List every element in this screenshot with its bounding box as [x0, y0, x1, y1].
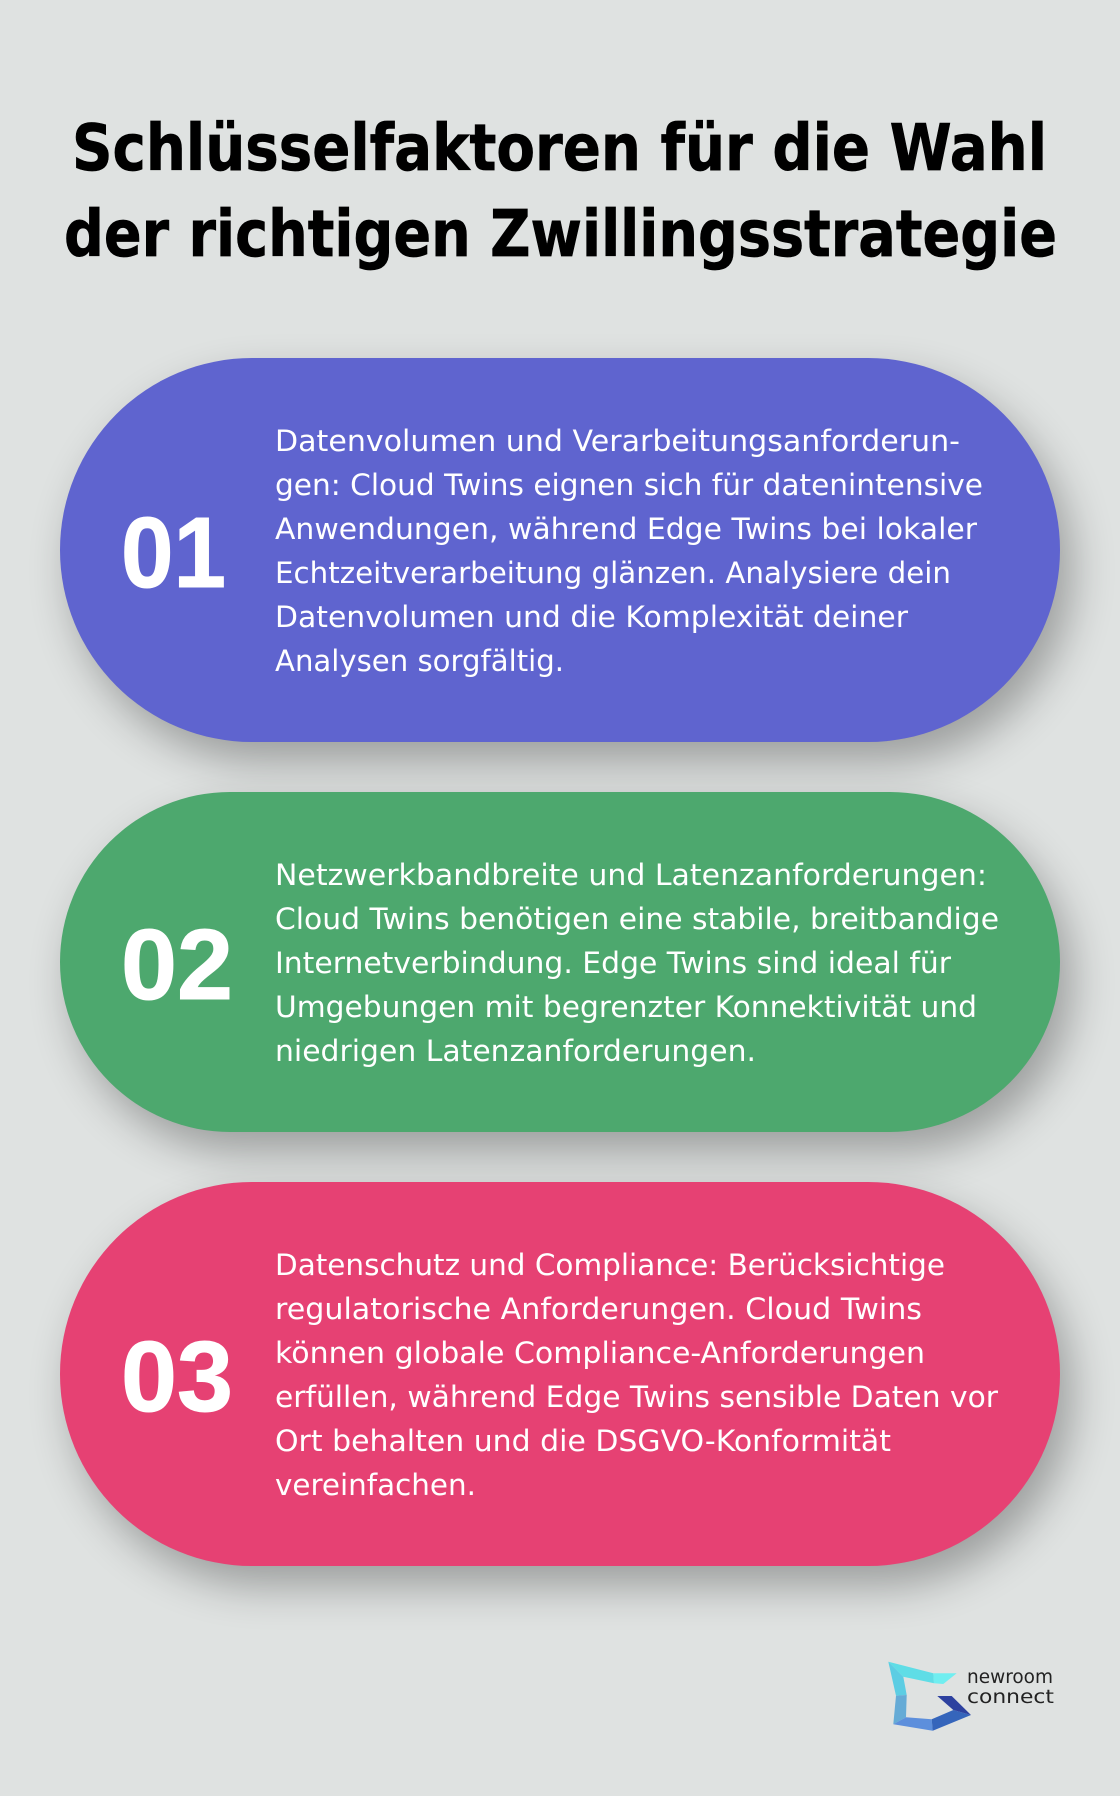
logo wordmark [967, 1666, 1054, 1708]
icon: logo mark [888, 1662, 971, 1731]
number 03: 03 [121, 1321, 233, 1433]
text: Datenschutz und Compliance: regulatorische Anforderungen. Cloud Twins [275, 1292, 922, 1326]
text: Netzwerkbandbreite und Latenz: niedrigen Latenzanforderungen. [275, 1034, 756, 1068]
text: Datenschutz und Compliance [275, 1248, 998, 1502]
text: Netzwerkbandbreite und Latenz: Internetverbindung. Edge Twins sind ideal für [275, 946, 951, 980]
text: Datenschutz und Compliance: erfüllen, während Edge Twins sensible Daten vor [275, 1380, 998, 1414]
title [64, 112, 1057, 272]
text: Datenvolumen und Verarbeitung: Analysen sorgfältig. [275, 644, 564, 678]
text: Datenvolumen und Verarbeitung: Datenvolumen und die Komplexität deiner [275, 600, 908, 634]
number 01: 01 [121, 497, 226, 609]
text: Datenschutz und Compliance: Datenschutz und Compliance: Berücksichtige [275, 1248, 945, 1282]
text: Netzwerkbandbreite und Latenz: Cloud Twins benötigen eine stabile, breitbandige [275, 902, 999, 936]
text: Netzwerkbandbreite und Latenz: Netzwerkbandbreite und Latenzanforderungen: [275, 858, 987, 892]
text: Datenschutz und Compliance: Ort behalten und die DSGVO-Konformität [275, 1424, 891, 1458]
panel: Netzwerkbandbreite [60, 792, 1060, 1132]
text: Datenvolumen und Verarbeitung: gen: Cloud Twins eignen sich für datenintensive [275, 468, 983, 502]
text: Datenvolumen und Verarbeitung: Datenvolumen und Verarbeitungsanforderun- [275, 424, 960, 458]
logo wordmark: newroom [967, 1666, 1053, 1688]
panel: Datenvolumen [60, 358, 1060, 742]
text: Datenschutz und Compliance: können globale Compliance-Anforderungen [275, 1336, 925, 1370]
text: Datenvolumen und Verarbeitung: Anwendungen, während Edge Twins bei lokaler [275, 512, 977, 546]
text: Datenvolumen und Verarbeitung [275, 424, 983, 678]
panel: Datenschutz [60, 1182, 1060, 1566]
logo wordmark: connect [967, 1686, 1054, 1708]
text: Datenschutz und Compliance: vereinfachen. [275, 1468, 476, 1502]
text: Datenvolumen und Verarbeitung: Echtzeitverarbeitung glänzen. Analysiere dein [275, 556, 951, 590]
text: Netzwerkbandbreite und Latenz: Umgebungen mit begrenzter Konnektivität und [275, 990, 977, 1024]
number 02: 02 [121, 909, 233, 1021]
text: Netzwerkbandbreite und Latenz [275, 858, 999, 1068]
